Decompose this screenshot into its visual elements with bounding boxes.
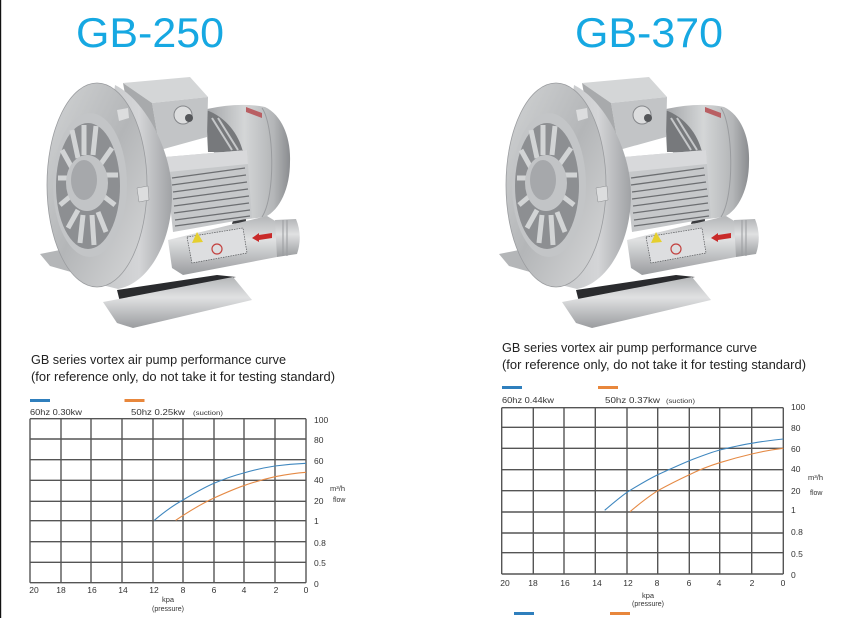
y axis labels: 40	[314, 475, 324, 485]
x axis labels: 2	[750, 578, 755, 588]
cropped legend bars at the bottom	[514, 612, 630, 615]
y axis labels	[791, 402, 823, 580]
legend: 60hz 0.30kw	[30, 407, 83, 417]
x axis labels: 12	[623, 578, 633, 588]
y axis labels: 0.8	[791, 527, 803, 537]
y axis labels: flow	[333, 497, 346, 504]
y axis labels: 100	[314, 415, 328, 425]
x axis labels: 0	[304, 585, 309, 595]
panel: GB-370	[499, 9, 823, 615]
x axis labels	[500, 578, 786, 608]
chart: GB-370 performance curve	[500, 402, 823, 608]
y axis labels: 80	[314, 435, 324, 445]
x axis labels: 4	[717, 578, 722, 588]
x axis labels: 0	[781, 578, 786, 588]
x axis labels: 14	[592, 578, 602, 588]
legend: (suction)	[666, 398, 695, 405]
title: GB-250: GB-250	[76, 9, 224, 56]
y axis labels: m³/h	[330, 484, 345, 493]
y axis labels: 0.8	[314, 538, 326, 548]
x axis labels: 18	[56, 585, 66, 595]
y axis labels: 0	[791, 570, 796, 580]
legend: 60hz 0.44kw	[502, 395, 555, 405]
curve heading: (for reference only, do not take it for testing standard)	[31, 370, 335, 384]
y axis labels: 0.5	[314, 558, 326, 568]
legend: 50hz 0.37kw	[605, 395, 661, 405]
y axis labels: 100	[791, 402, 805, 412]
curve heading: (for reference only, do not take it for testing standard)	[502, 358, 806, 372]
curve heading	[502, 341, 806, 372]
x axis labels: 8	[655, 578, 660, 588]
x axis labels	[29, 585, 309, 613]
x axis labels: 20	[29, 585, 39, 595]
y axis labels: 20	[791, 486, 801, 496]
x axis labels: 20	[500, 578, 510, 588]
curve heading: GB series vortex air pump performance curve	[502, 341, 757, 355]
x axis labels: 6	[212, 585, 217, 595]
left border line	[0, 0, 1, 618]
panel: GB-250	[29, 9, 346, 613]
y axis labels: 0.5	[791, 549, 803, 559]
x axis labels: 16	[87, 585, 97, 595]
y axis labels: 20	[314, 496, 324, 506]
icon: GB-370 vortex air pump	[499, 77, 759, 328]
y axis labels	[314, 415, 346, 589]
y axis labels: 80	[791, 423, 801, 433]
icon: GB-250 vortex air pump	[40, 77, 300, 328]
y axis labels: 60	[314, 456, 324, 466]
curve heading: GB series vortex air pump performance curve	[31, 353, 286, 367]
legend	[502, 386, 695, 405]
y axis labels: 1	[791, 505, 796, 515]
x axis labels: (pressure)	[152, 606, 184, 613]
legend: 50hz 0.25kw	[131, 407, 186, 417]
y axis labels: 0	[314, 579, 319, 589]
legend	[30, 399, 223, 417]
orange curve 50hz	[630, 448, 783, 512]
y axis labels: 1	[314, 516, 319, 526]
x axis labels: (pressure)	[632, 601, 664, 608]
y axis labels: 60	[791, 444, 801, 454]
x axis labels: 14	[118, 585, 128, 595]
x axis labels: 16	[560, 578, 570, 588]
x axis labels: 18	[528, 578, 538, 588]
x axis labels: 12	[149, 585, 159, 595]
orange curve 50hz	[176, 472, 306, 520]
x axis labels: kpa	[162, 595, 175, 604]
title: GB-370: GB-370	[575, 9, 723, 56]
x axis labels: 4	[242, 585, 247, 595]
y axis labels: 40	[791, 464, 801, 474]
y axis labels: m³/h	[808, 473, 823, 482]
blue curve 60hz	[605, 439, 783, 510]
blue curve 60hz	[154, 463, 306, 520]
x axis labels: 8	[181, 585, 186, 595]
chart: GB-250 performance curve	[29, 415, 346, 613]
y axis labels: flow	[810, 490, 823, 497]
x axis labels: 6	[687, 578, 692, 588]
legend: (suction)	[193, 410, 223, 417]
curve heading	[31, 353, 335, 384]
x axis labels: 2	[274, 585, 279, 595]
x axis labels: kpa	[642, 591, 655, 600]
